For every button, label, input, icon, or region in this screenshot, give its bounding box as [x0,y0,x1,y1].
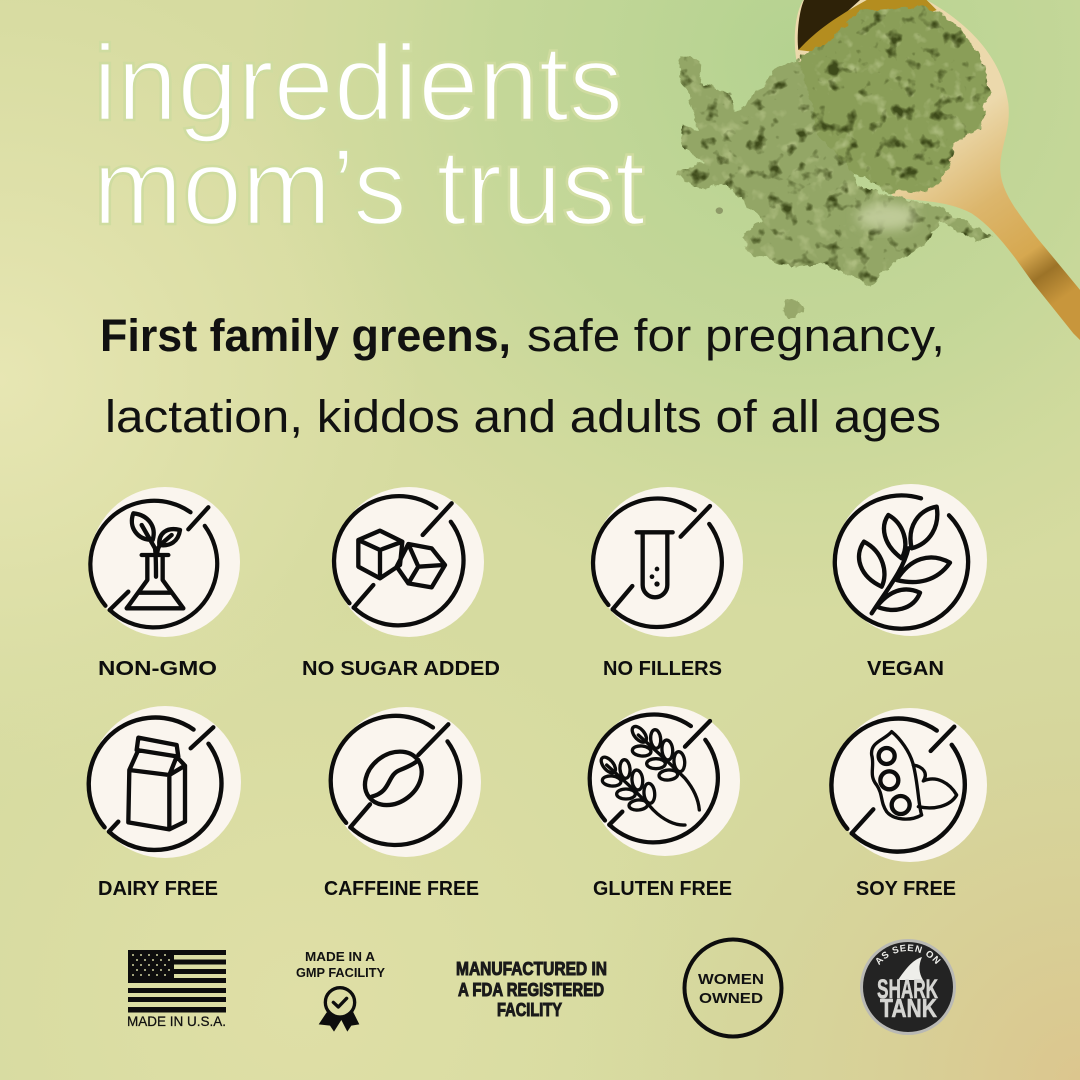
image: gold spoon with green powder [677,0,1080,341]
powder heap in spoon [800,7,988,192]
spoon [795,0,1080,341]
badge: FDA registered facility: MANUFACTURED IN [456,959,607,979]
badge: GMP facility [296,950,386,1032]
title [93,22,645,247]
subheading: lactation, kiddos and adults of all ages [105,391,941,442]
label: gluten free: GLUTEN FREE [593,878,732,900]
icon: soy free [831,708,987,862]
badge: as seen on Shark Tank: AS SEEN ON [876,944,941,966]
title: mom’s trust [93,126,645,247]
badge: as seen on Shark Tank: SHARK [877,974,938,1004]
subheading: First family greens, [100,310,511,361]
icon: gluten free [590,706,740,856]
badge: as seen on Shark Tank [860,939,956,1035]
badge: as seen on Shark Tank: TANK [880,993,937,1023]
icon: no sugar added [334,487,484,637]
badge: women owned: WOMEN [698,971,764,988]
badge: GMP facility: MADE IN A [305,950,375,964]
label: caffeine free: CAFFEINE FREE [324,878,479,900]
label: vegan: VEGAN [867,658,944,680]
badge: women owned: OWNED [699,990,763,1007]
icon: no fillers [593,487,743,637]
subheading: safe for pregnancy, [527,310,945,361]
badge: FDA registered facility: A FDA REGISTERED [458,980,604,1000]
powder pile [677,57,990,285]
spoon bowl shadow [798,0,860,50]
icon: vegan [835,484,987,636]
spoon bowl gold reflection [798,0,937,53]
title: ingredients [93,22,623,143]
subheading [100,310,945,442]
badge: FDA registered facility: FACILITY [497,1000,562,1020]
label: non-GMO: NON-GMO [98,658,217,680]
label: no sugar added: NO SUGAR ADDED [302,658,500,680]
powder crumb small [716,207,723,214]
icon: non-GMO [90,487,240,637]
badge: GMP facility: GMP FACILITY [296,966,386,980]
powder crumb [782,300,805,317]
label: no fillers: NO FILLERS [603,658,722,680]
icon: dairy free [89,706,241,858]
powder highlight [857,203,917,230]
label: dairy free: DAIRY FREE [98,878,218,900]
badge: made in USA flag [127,950,226,1029]
label: soy free: SOY FREE [856,878,956,900]
badge: FDA registered facility [456,959,607,1020]
badge: women owned [684,940,782,1036]
icon: caffeine free [331,707,481,857]
badge: made in USA flag: MADE IN U.S.A. [127,1013,226,1029]
